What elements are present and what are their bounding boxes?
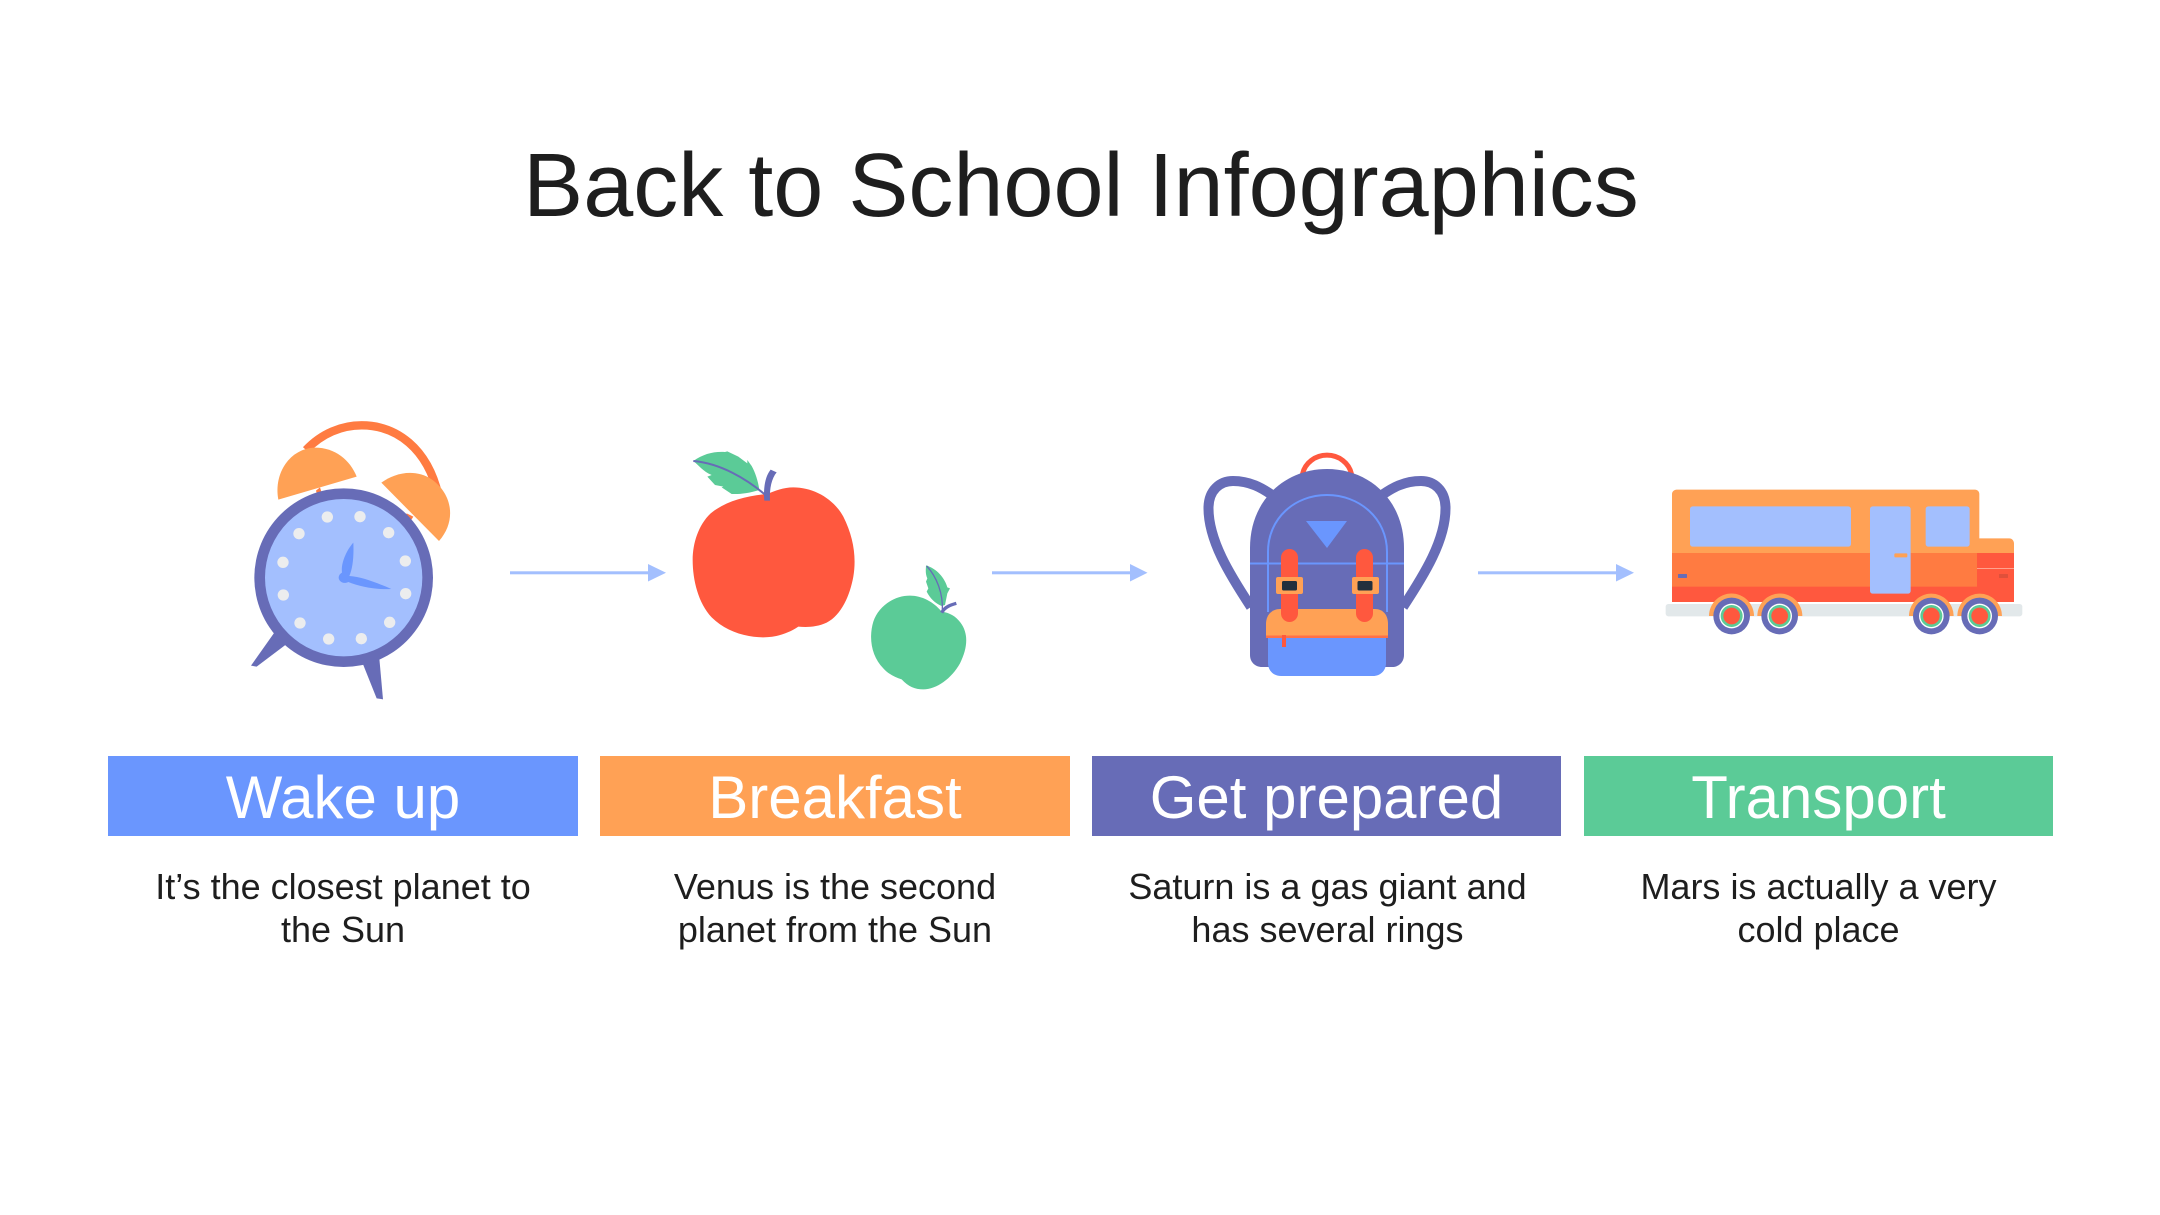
arrow 1 <box>510 564 666 582</box>
arrow 2 <box>992 564 1148 582</box>
description: Wake up: the Sun <box>281 909 405 950</box>
heading bar: Wake up: Wake up <box>226 764 460 831</box>
description: Wake up: It’s the closest planet to <box>155 866 531 907</box>
heading bar: Transport: Transport <box>1691 764 1946 831</box>
title: Back to School Infographics <box>523 136 1639 236</box>
description: Get prepared: Saturn is a gas giant and <box>1128 866 1527 907</box>
description: Transport: Mars is actually a very <box>1640 866 1997 907</box>
icon: apples <box>693 451 966 689</box>
heading bar: Get prepared <box>1092 756 1561 836</box>
heading bar: Wake up <box>108 756 578 836</box>
description: Get prepared <box>1128 866 1527 950</box>
description: Transport <box>1640 866 1997 950</box>
description: Transport: cold place <box>1737 909 1900 950</box>
description: Breakfast: Venus is the second <box>674 866 996 907</box>
heading bar: Breakfast: Breakfast <box>708 764 962 831</box>
heading bar: Breakfast <box>600 756 1070 836</box>
description: Breakfast <box>674 866 996 950</box>
icon: backpack <box>1208 455 1446 676</box>
description: Get prepared: has several rings <box>1191 909 1464 950</box>
heading bar: Transport <box>1584 756 2053 836</box>
arrow 3 <box>1478 564 1634 582</box>
icon: bus <box>1666 490 2022 634</box>
description: Wake up <box>155 866 531 950</box>
heading bar: Get prepared: Get prepared <box>1150 764 1503 831</box>
description: Breakfast: planet from the Sun <box>678 909 992 950</box>
icon: alarm clock <box>251 425 450 699</box>
